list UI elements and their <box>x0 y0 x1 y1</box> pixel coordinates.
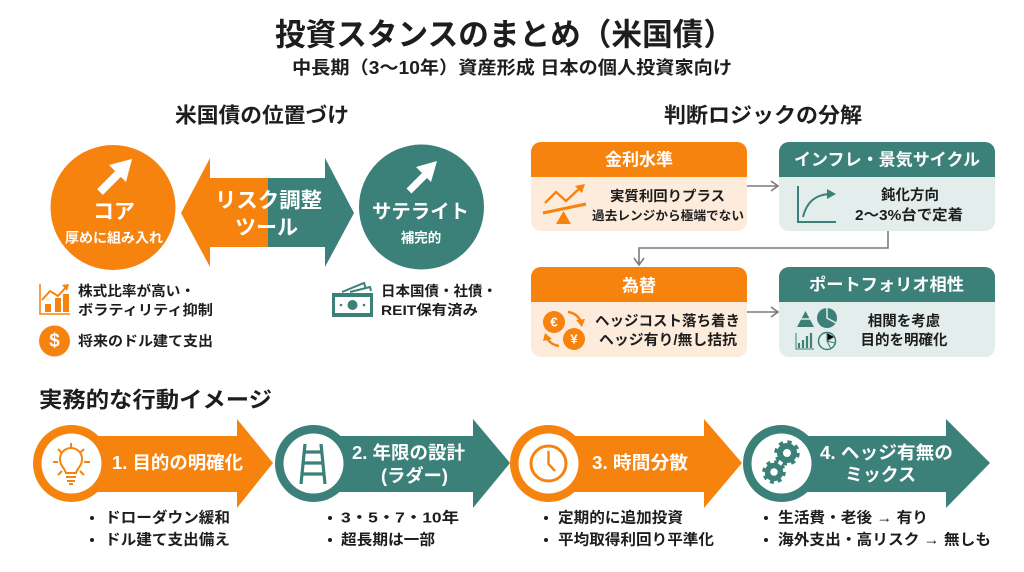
title: 投資スタンスのまとめ（米国債） <box>275 18 734 52</box>
icon: banknotes <box>332 283 373 317</box>
arrow: FX to portfolio <box>747 307 778 317</box>
panel: foreign exchange: 為替 <box>622 276 656 296</box>
text: stock ratio: ボラティリティ抑制 <box>78 302 213 318</box>
icon: clock <box>531 446 566 481</box>
satellite circle: 補完的 <box>401 230 441 246</box>
bullets: step 1: ドローダウン緩和 <box>105 508 230 526</box>
panel: foreign exchange: ヘッジコスト落ち着き <box>595 312 740 330</box>
subtitle: 中長期（3〜10年）資産形成 日本の個人投資家向け <box>292 57 732 78</box>
panel: interest rate level: 実質利回りプラス <box>610 188 725 204</box>
text: Japanese holdings: REIT保有済み <box>381 302 478 318</box>
core circle: 厚めに組み入れ <box>65 230 164 246</box>
step 2 arrow: maturity design: (ラダー) <box>381 465 448 486</box>
icon: trend on seesaw <box>543 184 586 224</box>
panel: interest rate level: 金利水準 <box>605 150 673 170</box>
icon: dollar coin: $ <box>49 330 60 352</box>
core circle <box>50 145 176 270</box>
panel: portfolio correlation <box>779 267 995 357</box>
icon: currency exchange: ¥ <box>570 332 578 346</box>
step 2 arrow: maturity design <box>275 419 510 508</box>
panel: inflation and business cycle: 2〜3%台で定着 <box>855 206 963 224</box>
satellite circle <box>359 144 484 270</box>
arrow: rate to inflation <box>747 181 778 191</box>
panel: interest rate level <box>531 142 747 231</box>
step 1 arrow: clarify purpose <box>33 419 273 508</box>
text: future dollar spending: 将来のドル建て支出 <box>78 333 213 349</box>
icon: ladder <box>301 444 325 484</box>
text: Japanese holdings <box>381 283 497 318</box>
panel: foreign exchange <box>531 267 747 357</box>
panel: portfolio correlation: 目的を明確化 <box>860 331 948 349</box>
icon: light bulb <box>53 443 90 484</box>
heading: practical actions: 実務的な行動イメージ <box>39 388 272 412</box>
panel: portfolio correlation: 相関を考慮 <box>868 312 940 330</box>
bullets: step 3 <box>544 508 714 548</box>
double arrow: risk adjustment tool: リスク調整 <box>215 190 322 212</box>
bullets: step 3: 平均取得利回り平準化 <box>558 530 714 548</box>
heading: position of US Treasuries: 米国債の位置づけ <box>175 104 349 128</box>
bullets: step 4 <box>764 508 991 548</box>
bullets: step 4: 海外支出・高リスク → 無しも <box>778 530 991 548</box>
panel: inflation and business cycle <box>779 142 995 231</box>
text: stock ratio: 株式比率が高い・ <box>78 283 195 299</box>
icon: flattening curve <box>798 186 836 222</box>
panel: inflation and business cycle: インフレ・景気サイクル <box>794 150 980 170</box>
double arrow: risk adjustment tool: ツール <box>235 216 298 240</box>
icon: currency exchange <box>543 311 585 350</box>
heading: decision logic: 判断ロジックの分解 <box>664 104 862 128</box>
icon: currency exchange: € <box>550 314 558 330</box>
step 1 arrow: clarify purpose: 1. 目的の明確化 <box>112 453 243 473</box>
step 4 arrow: hedge mix: 4. ヘッジ有無の <box>820 443 953 463</box>
bullets: step 2: 超長期は一部 <box>341 530 435 548</box>
panel: position diagram <box>39 144 497 356</box>
step 3 arrow: time diversification: 3. 時間分散 <box>592 453 688 473</box>
bullets: step 2 <box>328 508 459 548</box>
panel: interest rate level: 過去レンジから極端でない <box>592 208 744 223</box>
text: Japanese holdings: 日本国債・社債・ <box>381 283 497 299</box>
bullets: step 1: ドル建て支出備え <box>105 532 230 548</box>
icon: chart set <box>796 308 837 350</box>
step 3 arrow: time diversification <box>510 419 742 508</box>
bullets: step 3: 定期的に追加投資 <box>558 508 683 526</box>
satellite circle: サテライト <box>372 201 469 223</box>
step 4 arrow: hedge mix <box>743 419 990 508</box>
bullets: step 2: 3・5・7・10年 <box>341 508 459 526</box>
step 4 arrow: hedge mix: ミックス <box>845 465 916 485</box>
icon: rising bar chart <box>40 284 70 314</box>
arrow: inflation to FX <box>634 231 888 265</box>
panel: portfolio correlation: ポートフォリオ相性 <box>809 274 964 294</box>
step 2 arrow: maturity design: 2. 年限の設計 <box>352 442 465 463</box>
double arrow: risk adjustment tool <box>181 158 354 267</box>
panel: inflation and business cycle: 鈍化方向 <box>881 186 939 204</box>
core circle: コア <box>93 200 135 224</box>
panel: foreign exchange: ヘッジ有り/無し拮抗 <box>599 331 738 349</box>
bullets: step 1 <box>90 508 230 548</box>
icon: dollar coin <box>39 326 70 356</box>
text: stock ratio <box>78 283 213 318</box>
bullets: step 4: 生活費・老後 → 有り <box>778 508 928 526</box>
icon: gears <box>764 442 798 482</box>
